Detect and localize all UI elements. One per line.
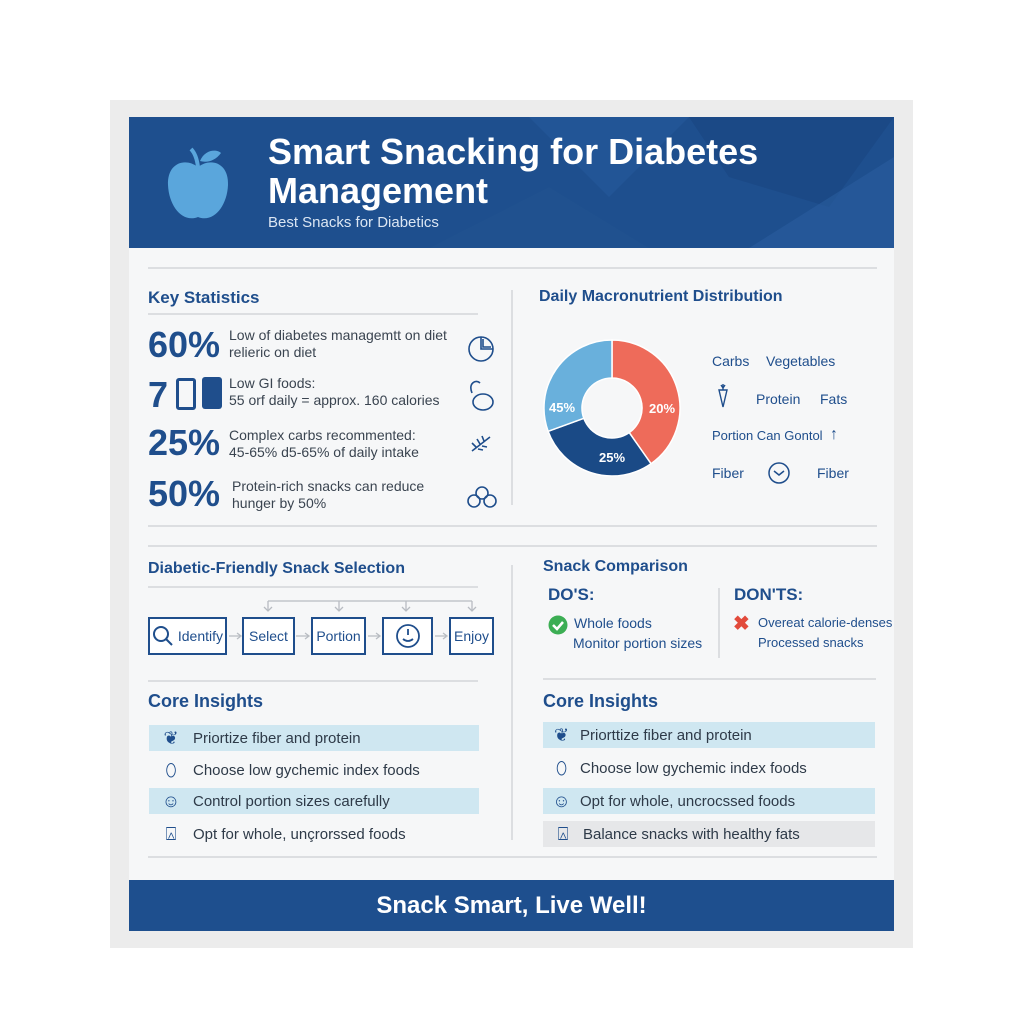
icon: apple [168,148,228,218]
donut chart [544,340,680,476]
stats block: hunger by 50% [232,495,326,511]
stats block: 50% [148,473,220,514]
legend: Vegetables [766,353,835,369]
legend [712,353,849,484]
heading: core insights left: Core Insights [148,691,263,711]
do's column: DO'S: [548,585,595,604]
step: smile icon [382,617,433,655]
step: enjoy [449,617,494,655]
icons [467,336,497,508]
heading: core insights right: Core Insights [543,691,658,711]
heading: macronutrients: Daily Macronutrient Distribution [539,288,783,305]
insights list left: ❦ [163,728,179,748]
stats block: 60% [148,324,220,365]
don'ts column [733,585,892,650]
insights list left: Priortize fiber and protein [193,730,361,746]
don'ts column: Processed snacks [758,635,864,650]
stats block: Low of diabetes managemtt on diet [229,327,447,343]
stats block [148,324,497,514]
insights list left: ⬯ [165,760,177,780]
insights list right: Balance snacks with healthy fats [583,826,800,842]
insights list left: Choose low gychemic index foods [193,762,420,778]
legend: Fiber [817,465,849,481]
outer frame [110,100,913,948]
footer banner [129,880,894,931]
step: select [242,617,295,655]
heading: key statistics: Key Statistics [148,288,260,307]
heading: snack selection: Diabetic-Friendly Snack Selection [148,560,405,577]
stats block: Complex carbs recommented: [229,427,416,443]
insights list left: ⍓ [166,824,176,844]
flow diagram [229,600,476,640]
don'ts column: DON'TS: [734,585,803,604]
donut chart: 45% [549,400,575,415]
insights list right [543,722,875,847]
insights list right: ❦ [554,724,569,744]
insights list left [149,725,479,844]
step: select: Select [249,628,288,644]
stats block: 25% [148,422,220,463]
stats block: Low GI foods: [229,375,315,391]
insights list left: Control portion sizes carefully [193,792,390,810]
divider vertical [511,290,513,505]
legend: Portion Can Gontol [712,428,823,443]
stats block: 45-65% d5-65% of daily intake [229,444,419,460]
step: identify [148,617,227,655]
insights list right: Opt for whole, uncrocssed foods [580,792,795,810]
stats block: relieric on diet [229,344,316,360]
divider vertical 2 [511,565,513,840]
subtitle: Best Snacks for Diabetics [268,214,439,231]
do's column [548,585,702,651]
header banner [129,117,894,248]
don'ts column: Overeat calorie-denses [758,615,892,630]
stats block: 7 [148,374,168,415]
title: Smart Snacking for Diabetes Management [268,131,758,211]
footer banner: Snack Smart, Live Well! [376,892,647,918]
donut chart: 25% [599,450,625,465]
insights list right: Priorttize fiber and protein [580,726,752,744]
step: identify: Identify [178,628,223,644]
stats block: Protein-rich snacks can reduce [232,478,424,494]
step: portion [311,617,366,655]
legend: ↑ [830,426,838,443]
legend: Carbs [712,353,749,369]
insights list right: ⬯ [556,758,567,778]
do's column: Whole foods [574,615,652,631]
insights list right: Choose low gychemic index foods [580,760,807,776]
donut chart: 20% [649,401,675,416]
legend: Protein [756,391,800,407]
legend: Fiber [712,465,744,481]
step: enjoy: Enjoy [454,628,489,644]
heading: snack comparison: Snack Comparison [543,558,688,575]
insights list right: ⍓ [558,824,568,844]
don'ts column: ✖ [733,613,750,635]
insights list left: Opt for whole, unçrorssed foods [193,826,406,842]
step: portion: Portion [316,628,361,644]
stats block: 55 orf daily = approx. 160 calories [229,392,440,408]
legend: Fats [820,391,847,407]
do's column: Monitor portion sizes [573,635,702,651]
inner card [129,117,894,931]
insights list right: ☺ [552,790,571,810]
insights list left: ☺ [162,790,180,810]
